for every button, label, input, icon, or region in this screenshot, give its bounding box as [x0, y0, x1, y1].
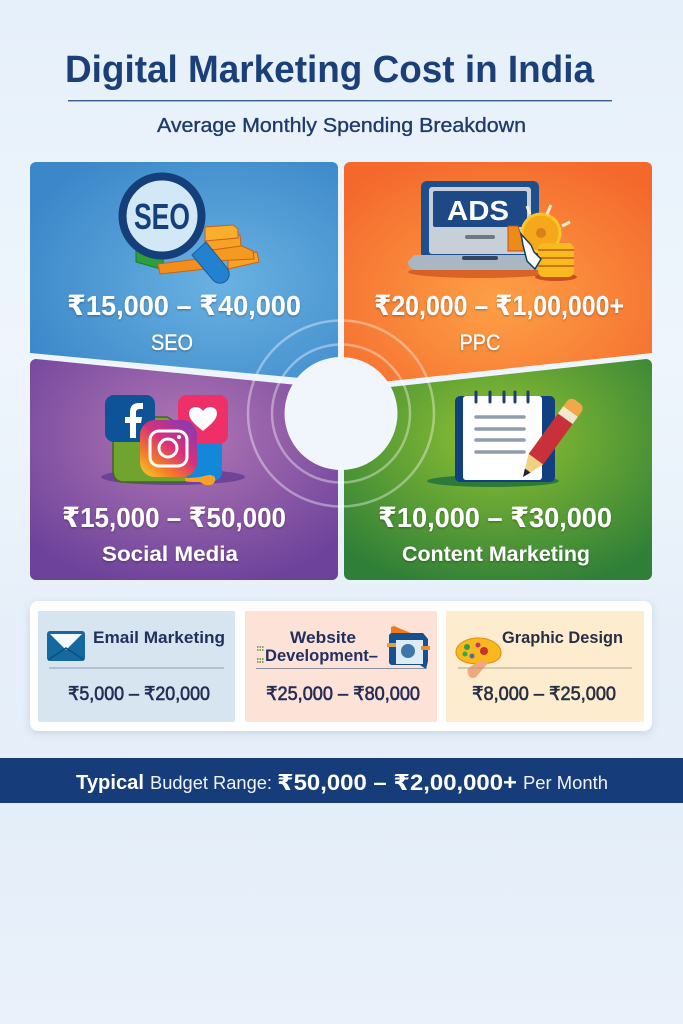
Email Marketing heading: Email Marketing [93, 628, 225, 647]
icon: SEO magnifier and gold bars: SEO [134, 196, 190, 237]
icon: ADS laptop and coins: ADS [447, 195, 509, 226]
Content Marketing label: Content Marketing [402, 543, 590, 566]
banner: typical budget [0, 758, 683, 803]
Content Marketing price: ₹10,000 – ₹30,000 [378, 502, 612, 533]
SEO label: SEO [151, 330, 193, 355]
panel: PPC [344, 162, 652, 386]
Graphic Design price: ₹8,000 – ₹25,000 [472, 684, 616, 705]
Website Development price: ₹25,000 – ₹80,000 [266, 684, 420, 705]
panel: Content Marketing [344, 359, 652, 580]
SEO price: ₹15,000 – ₹40,000 [67, 290, 301, 321]
icon: SEO magnifier and gold bars [122, 176, 259, 283]
Graphic Design heading: Graphic Design [502, 628, 623, 647]
Social Media price: ₹15,000 – ₹50,000 [62, 502, 286, 533]
banner: typical budget: Per Month [523, 773, 608, 793]
icon: social media cluster [101, 395, 245, 485]
title divider [68, 100, 612, 101]
card: Email Marketing [38, 611, 235, 722]
icon: paint palette [456, 638, 501, 678]
center circle with rings [248, 320, 434, 506]
panel: additional services [30, 601, 652, 731]
panel: Social Media [30, 359, 338, 580]
Email Marketing price: ₹5,000 – ₹20,000 [68, 684, 210, 705]
icon: envelope [47, 631, 85, 661]
icon: ADS laptop and coins [408, 181, 577, 281]
title: Digital Marketing Cost in India [65, 49, 595, 91]
Website Development heading: Website [290, 628, 356, 647]
card: Website Development: Development– [265, 646, 378, 665]
icon: notepad and pencil [427, 392, 585, 487]
panel: SEO [30, 162, 338, 382]
subtitle: Average Monthly Spending Breakdown [157, 115, 526, 137]
PPC price: ₹20,000 – ₹1,00,000+ [374, 290, 624, 321]
banner: typical budget: Typical [76, 772, 144, 794]
Social Media label: Social Media [102, 543, 238, 566]
PPC label: PPC [460, 330, 501, 355]
small green marks [257, 647, 264, 662]
banner: typical budget: Budget Range: [150, 773, 272, 793]
card: Website Development [245, 611, 437, 722]
banner: typical budget: ₹50,000 – ₹2,00,000+ [277, 770, 517, 795]
card: Graphic Design [446, 611, 644, 722]
icon: website window [387, 626, 430, 669]
